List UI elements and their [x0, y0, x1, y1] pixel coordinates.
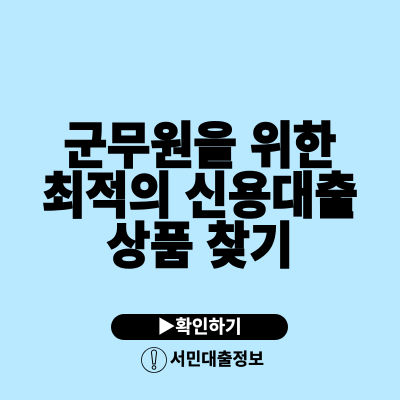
title line 3: 상품 찾기 [107, 218, 293, 273]
title line 1: 군무원을 위한 [64, 118, 336, 173]
icon: exclamation circle [141, 347, 167, 373]
brand name: 서민대출정보 [170, 350, 264, 369]
brand logo [141, 347, 264, 373]
title line 2: 최적의 신용대출 [42, 168, 358, 223]
button: confirm [111, 314, 288, 340]
button: confirm: ▶확인하기 [157, 317, 242, 337]
title [42, 118, 358, 273]
